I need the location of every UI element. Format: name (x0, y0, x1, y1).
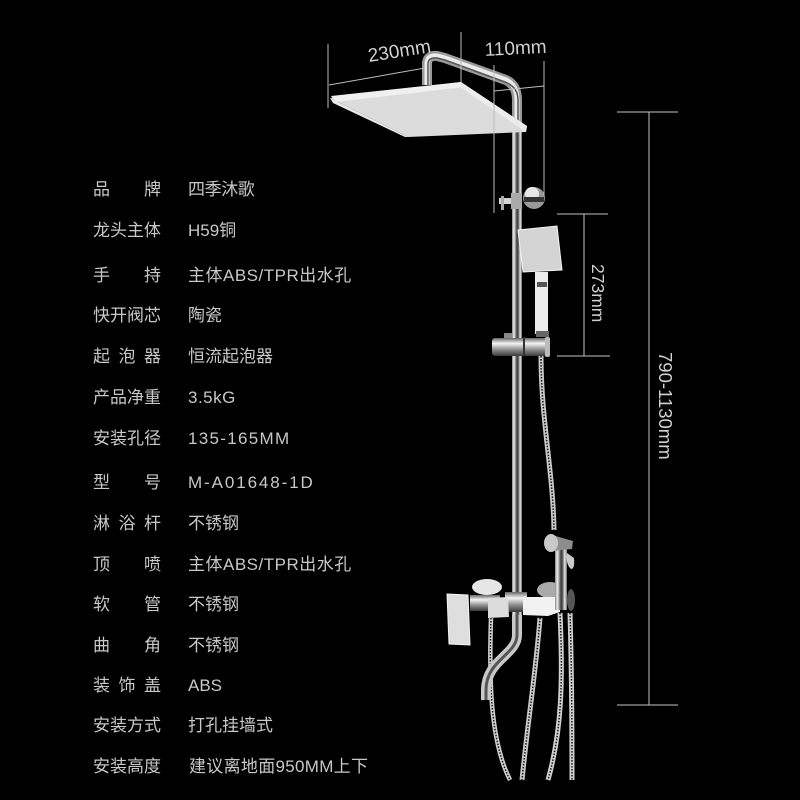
spec: faucet body: 主 (127, 221, 144, 240)
shower arm (427, 56, 518, 130)
spec: installation height (93, 757, 368, 776)
spec: model: 型 (93, 473, 110, 492)
spec: installation method: 安 (93, 716, 110, 735)
spec: hose: 不锈钢 (188, 595, 239, 614)
spec: top spray: 主体ABS/TPR出水孔 (188, 555, 352, 574)
spec: mounting hole distance: 径 (144, 429, 161, 448)
spec: top spray: 喷 (144, 555, 161, 574)
spec: faucet body (93, 221, 236, 240)
spec: decorative cover: ABS (188, 676, 222, 695)
spec: installation method (93, 716, 273, 735)
dimension: 230mm width: 230mm (366, 36, 432, 67)
spec: valve core: 快 (93, 306, 110, 325)
shower rail (512, 125, 522, 625)
spec: installation method: 打孔挂墙式 (188, 716, 273, 735)
spec: aerator: 起 (93, 347, 110, 366)
spec: net weight: 产 (93, 388, 110, 407)
spec: net weight (93, 388, 236, 407)
dimension: 110mm depth (484, 37, 547, 213)
spec: aerator: 器 (144, 347, 161, 366)
spec: hose (93, 595, 239, 614)
spec: faucet body: H59铜 (188, 221, 236, 240)
spec: top spray (93, 555, 352, 574)
spec: brand: 四季沐歌 (188, 180, 254, 199)
dimension: 790-1130mm total height: 790-1130mm (655, 352, 676, 460)
spec: aerator: 泡 (118, 347, 136, 366)
spec: installation height: 度 (144, 757, 161, 776)
top shower head (330, 82, 527, 137)
spec: elbow: 曲 (93, 636, 110, 655)
dimension: 110mm depth: 110mm (484, 37, 547, 61)
spec: elbow: 角 (144, 636, 161, 655)
spec: top spray: 顶 (93, 555, 110, 574)
spec: hand shower (93, 266, 352, 285)
spec: installation method: 装 (110, 716, 127, 735)
spec: hand shower: 主体ABS/TPR出水孔 (188, 266, 352, 285)
spec: elbow: 不锈钢 (188, 636, 239, 655)
spec: decorative cover: 饰 (118, 676, 136, 695)
spec: hand shower: 手 (93, 266, 110, 285)
spec: shower rod: 杆 (144, 514, 161, 533)
spec: shower rod: 浴 (118, 514, 136, 533)
hand shower (518, 226, 562, 337)
spec: faucet body: 龙 (93, 221, 110, 240)
spec: model: M-A01648-1D (188, 473, 315, 492)
spec: model: 号 (144, 473, 161, 492)
spec: valve core: 阀 (127, 306, 144, 325)
hoses (490, 356, 572, 780)
handheld bidet spray (544, 534, 575, 611)
wall bracket and lever (499, 187, 545, 210)
spec: shower rod (93, 514, 239, 533)
spec: decorative cover (93, 676, 222, 695)
spec: net weight: 3.5kG (188, 388, 236, 407)
spec: model (93, 473, 315, 492)
spec: decorative cover: 装 (93, 676, 110, 695)
spec: installation height: 装 (110, 757, 127, 776)
spec: mounting hole distance: 孔 (127, 429, 144, 448)
spec: brand: 牌 (144, 180, 161, 199)
spec: valve core: 开 (110, 306, 127, 325)
spec: valve core: 芯 (144, 306, 161, 325)
spec: faucet body: 体 (144, 221, 161, 240)
spec list (93, 180, 368, 776)
spec: installation height: 高 (127, 757, 144, 776)
spec: shower rod: 不锈钢 (188, 514, 239, 533)
spec: hose: 软 (93, 595, 110, 614)
spec: valve core (93, 306, 222, 325)
spec: decorative cover: 盖 (144, 676, 161, 695)
mixer valve and handle (447, 579, 563, 645)
spec: mounting hole distance (93, 429, 290, 448)
spec: mounting hole distance: 135-165MM (188, 429, 290, 448)
spec: faucet body: 头 (110, 221, 127, 240)
spec: net weight: 品 (110, 388, 127, 407)
spec: hand shower: 持 (144, 266, 161, 285)
spout (486, 615, 517, 700)
spec: elbow (93, 636, 239, 655)
dimension: 273mm hand shower height: 273mm (588, 264, 608, 322)
spec: hose: 管 (144, 595, 161, 614)
spec: aerator: 恒流起泡器 (188, 347, 273, 366)
spec: brand: 品 (93, 180, 110, 199)
spec: brand (93, 180, 254, 199)
spec: mounting hole distance: 安 (93, 429, 110, 448)
dimension: 230mm width (328, 32, 461, 108)
spec: installation method: 方 (127, 716, 144, 735)
spec: net weight: 重 (144, 388, 161, 407)
spec: shower rod: 淋 (93, 514, 110, 533)
spec: installation method: 式 (144, 716, 161, 735)
spec: mounting hole distance: 装 (110, 429, 127, 448)
spec: valve core: 陶瓷 (188, 306, 222, 325)
spec: installation height: 安 (93, 757, 110, 776)
spec: net weight: 净 (127, 388, 144, 407)
spec: installation height: 建议离地面950MM上下 (189, 757, 368, 776)
sliding holder (492, 333, 550, 357)
spec: aerator (93, 347, 273, 366)
